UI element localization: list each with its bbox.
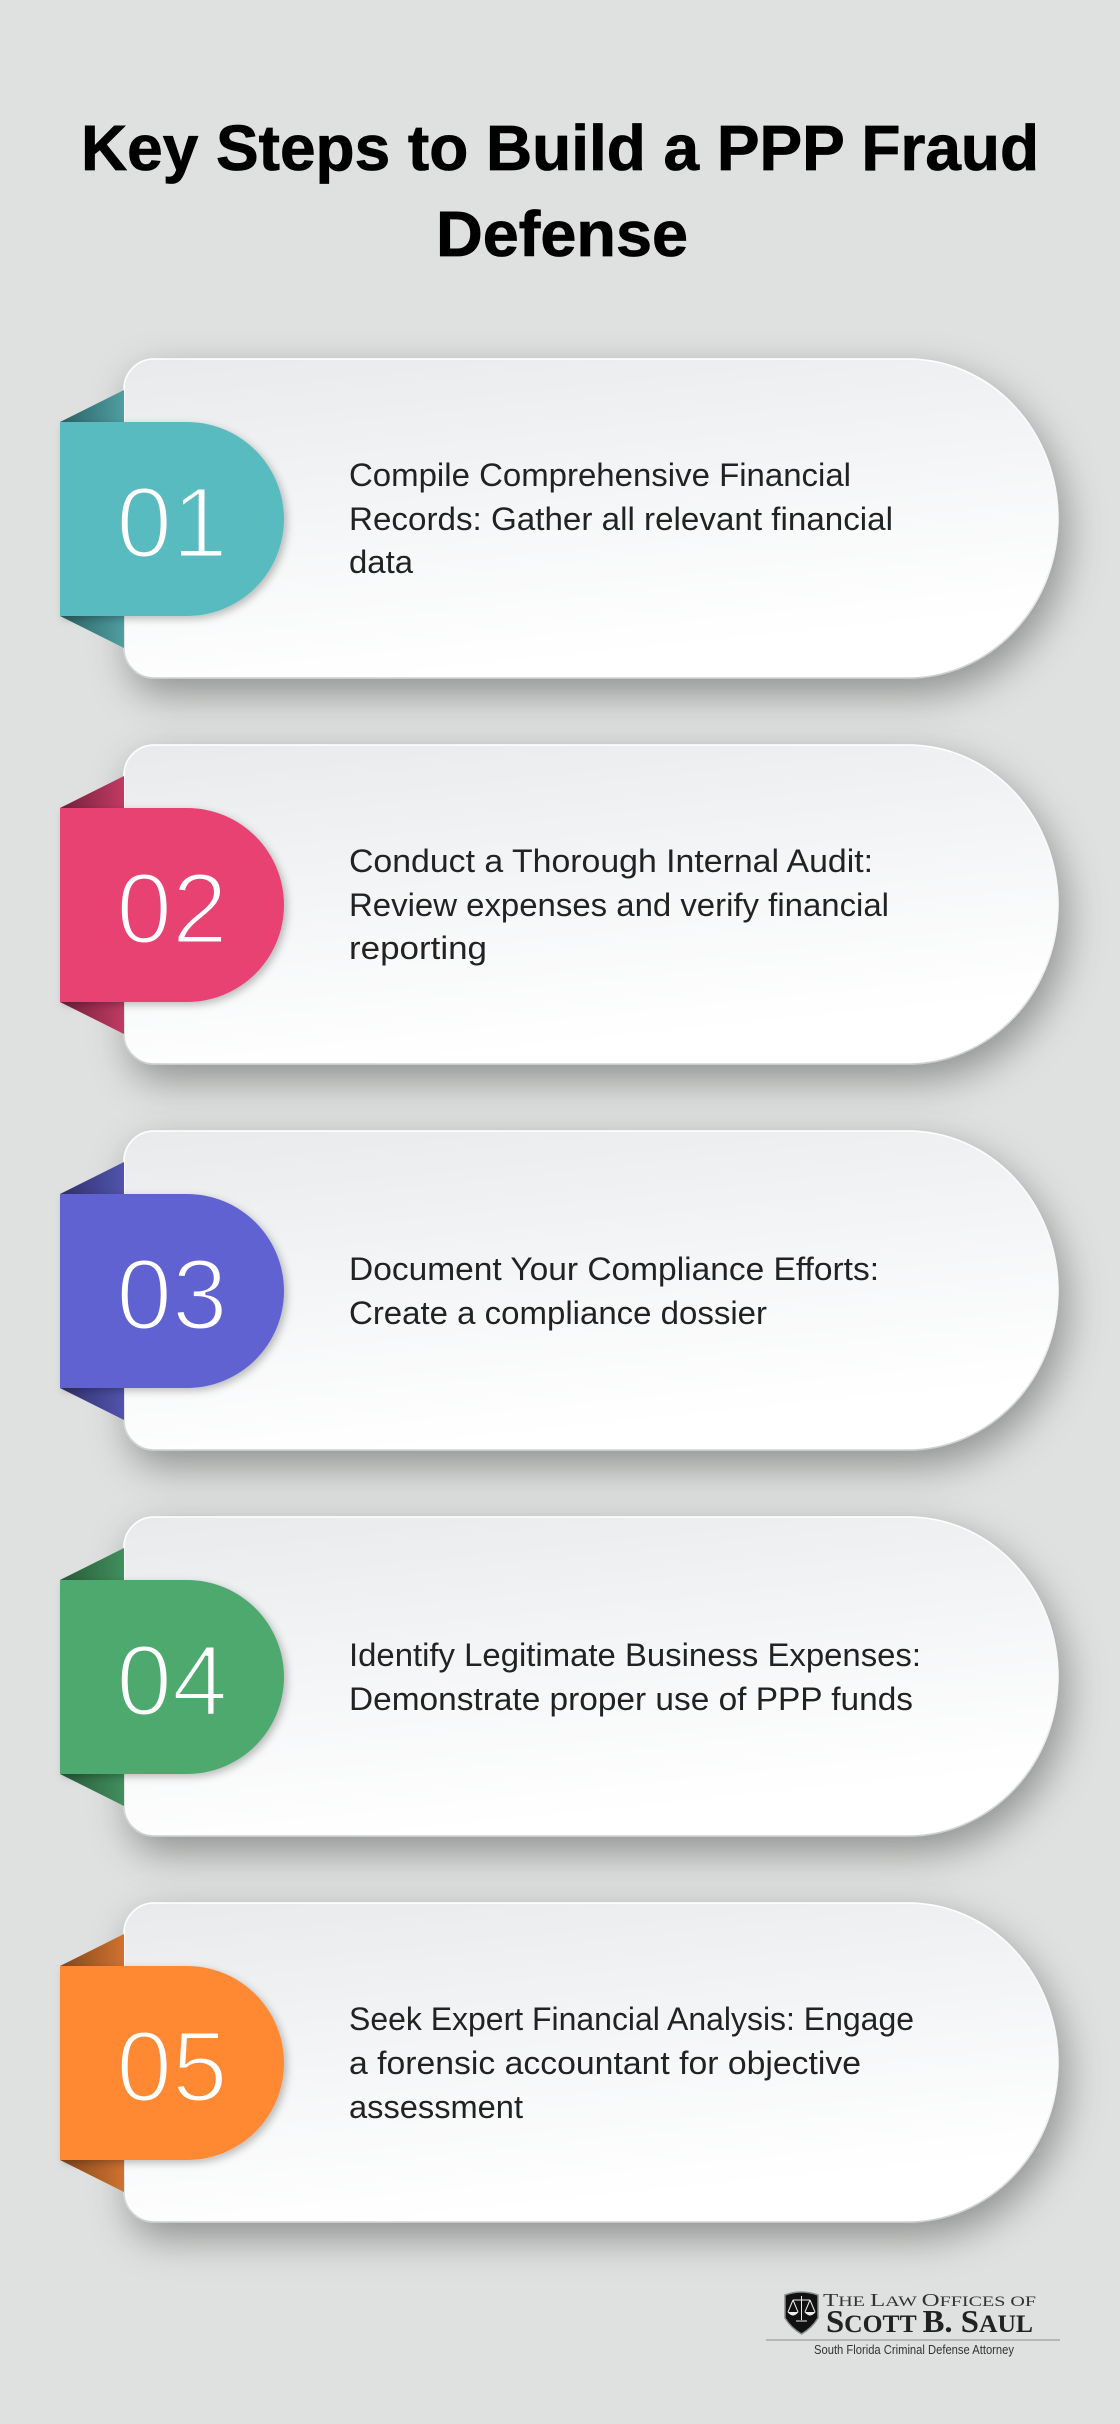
number 01: 01 [116, 467, 228, 579]
logo: law offices [766, 2290, 1060, 2357]
title [81, 112, 1039, 270]
badge 05 [60, 1966, 284, 2160]
card 05 [124, 1903, 1058, 2222]
divider rule [766, 2340, 1060, 2341]
step 01 text: data [349, 544, 413, 580]
title: Key Steps to Build a PPP Fraud [81, 112, 1039, 184]
badge 02 [60, 808, 284, 1002]
step 02 text: Conduct a Thorough Internal Audit: [349, 843, 873, 879]
title: Defense [436, 198, 688, 270]
number 04: 04 [116, 1625, 228, 1737]
step 04 text: Demonstrate proper use of PPP funds [349, 1681, 913, 1717]
step 01 text: Records: Gather all relevant financial [349, 501, 893, 537]
panel: step 02 [60, 745, 1058, 1064]
step 05 text: assessment [349, 2089, 523, 2125]
number 03: 03 [116, 1239, 228, 1351]
card 03 [124, 1131, 1058, 1450]
card 04 [124, 1517, 1058, 1836]
step 03 text [349, 1251, 879, 1331]
card 02 [124, 745, 1058, 1064]
step 02 text: Review expenses and verify financial [349, 887, 889, 923]
ribbon folds 03 [60, 1162, 124, 1420]
step 03 text: Document Your Compliance Efforts: [349, 1251, 879, 1287]
badge 04 [60, 1580, 284, 1774]
panel: step 01 [60, 359, 1058, 678]
firm name line 1: T HE L AW O FFICES OF [823, 2290, 1036, 2310]
step 05 text: a forensic accountant for objective [349, 2045, 861, 2081]
number 02: 02 [116, 853, 228, 965]
step 04 text: Identify Legitimate Business Expenses: [349, 1637, 921, 1673]
panel: step 04 [60, 1517, 1058, 1836]
ribbon folds 02 [60, 776, 124, 1034]
step 04 text [349, 1637, 921, 1717]
badge 03 [60, 1194, 284, 1388]
step 02 text: reporting [349, 930, 487, 966]
ribbon folds 04 [60, 1548, 124, 1806]
ribbon folds 05 [60, 1934, 124, 2192]
step 02 text [349, 843, 889, 966]
firm name line 2: SCOTT B. SAUL [826, 2303, 1033, 2339]
step 03 text: Create a compliance dossier [349, 1295, 767, 1331]
tagline: South Florida Criminal Defense Attorney [814, 2343, 1015, 2357]
step 01 text [349, 457, 893, 580]
step 01 text: Compile Comprehensive Financial [349, 457, 851, 493]
card 01 [124, 359, 1058, 678]
ribbon folds 01 [60, 390, 124, 648]
step 05 text: Seek Expert Financial Analysis: Engage [349, 2001, 914, 2037]
badge 01 [60, 422, 284, 616]
panel: step 05 [60, 1903, 1058, 2222]
icon: shield with scales [785, 2292, 818, 2334]
panel: step 03 [60, 1131, 1058, 1450]
step 05 text [349, 2001, 914, 2125]
number 05: 05 [116, 2011, 228, 2123]
